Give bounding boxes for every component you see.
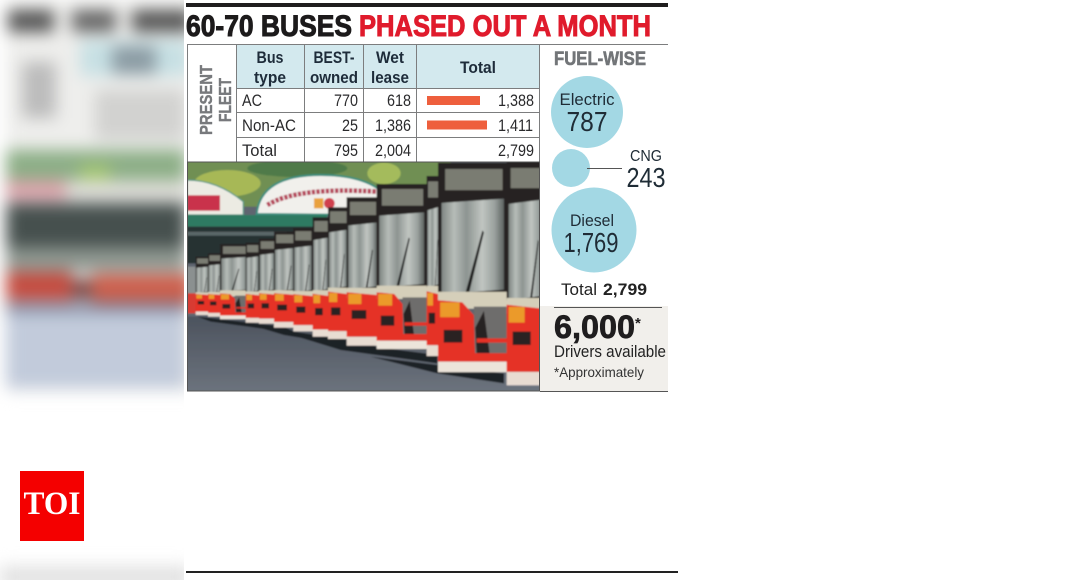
bubble: electric: 787 [566,106,608,137]
blurred background panel [0,0,184,580]
bubble: CNG: CNG [630,148,662,165]
drivers panel [540,306,668,392]
table rows: 1,411 [498,116,533,135]
table column headers [254,48,496,87]
fuel total: 2,799 [603,280,647,299]
logo: TOI: TOI [24,486,80,522]
table rows: Total [242,141,277,160]
drivers panel: Drivers available [554,342,666,361]
photo: row of buses [188,162,539,390]
bar: AC total [427,96,480,105]
fuel-wise heading: FUEL-WISE [554,49,646,70]
table rows: 2,004 [375,141,411,160]
title [186,10,651,43]
table column headers: owned [310,68,358,87]
table column headers: type [254,68,286,87]
fuel total: Total [561,280,597,299]
fuel total [561,280,647,299]
bubble: electric: Electric [560,90,615,109]
title: PHASED OUT A MONTH [359,10,651,43]
table header background [237,45,539,88]
title: 60-70 BUSES [186,10,352,43]
bubble: diesel: Diesel [570,211,614,230]
table rows [242,91,534,160]
table rows: 2,799 [498,141,534,160]
table column headers: BEST- [314,48,354,67]
drivers panel: *Approximately [554,364,644,380]
side label: present fleet: PRESENT [196,65,216,135]
table rows: 795 [334,141,358,160]
table rows: Non-AC [242,116,296,135]
bubble: CNG [552,148,666,193]
table rows: 1,388 [498,91,534,110]
bubble: electric [551,76,623,148]
table column headers: Wet [376,48,404,67]
top rule [186,3,668,7]
building [187,180,243,215]
drivers panel: * [635,315,641,332]
fuel-wise bubbles [551,76,666,272]
fleet table [187,44,668,162]
table rows: 25 [342,116,358,135]
logo: TOI [20,471,84,541]
table rows: 770 [334,91,358,110]
bubble: diesel: 1,769 [564,227,618,258]
side label: present fleet: FLEET [215,78,235,122]
side label: present fleet [196,65,235,135]
table rows: AC [242,91,262,110]
bar: Non-AC total [427,120,487,130]
bottom rule [186,571,678,573]
table column headers: Bus [256,48,284,67]
table column headers: lease [371,68,409,87]
drivers panel: 6,000 [554,309,635,345]
photo frame [188,162,540,391]
bubble: CNG: 243 [626,162,666,193]
table column headers: Total [460,58,496,77]
bubble: diesel [552,188,636,272]
table rows: 618 [387,91,411,110]
table rows: 1,386 [375,116,411,135]
